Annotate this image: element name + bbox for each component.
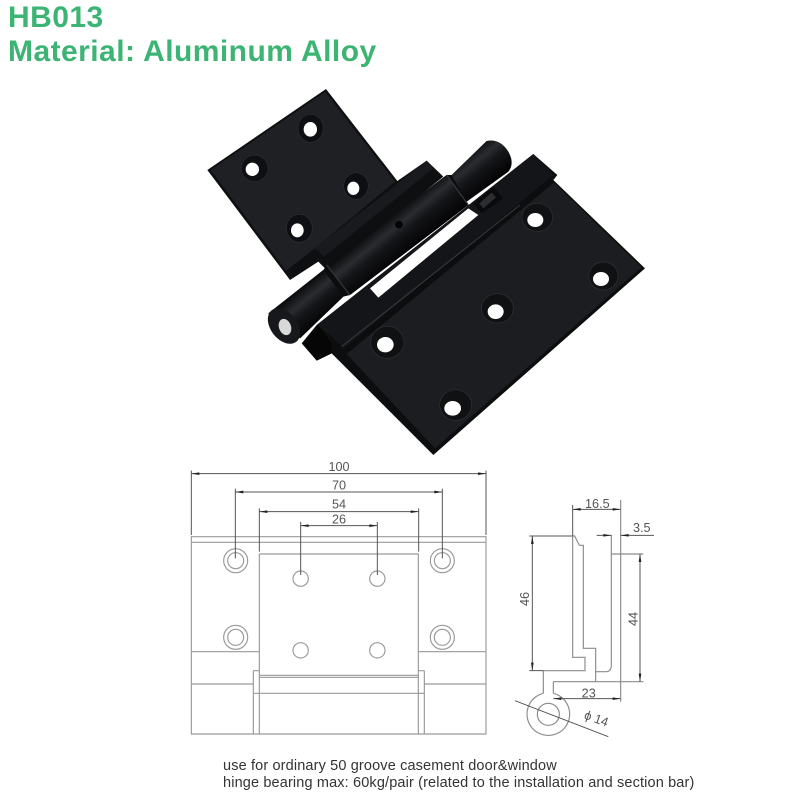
side profile technical drawing [514, 497, 654, 738]
side view dimension labels: 23 [582, 686, 596, 700]
right hinge leaf [302, 154, 645, 455]
side view dimension labels [518, 497, 651, 730]
usage note: use for ordinary 50 groove casement door&window [223, 758, 557, 774]
profile outline [543, 500, 643, 702]
title: HB013 [8, 1, 104, 34]
leaf outlines [191, 537, 486, 734]
hinge barrel [261, 141, 512, 350]
holes [224, 549, 454, 658]
front view dimension labels: 100 [328, 460, 350, 474]
side view dimension labels: 44 [626, 612, 640, 626]
dimension lines [515, 505, 654, 737]
side view dimension labels: 46 [518, 592, 532, 606]
side view dimension labels: ϕ 14 [582, 708, 610, 730]
dimension lines [191, 471, 486, 575]
usage note [223, 758, 694, 791]
side view dimension labels: 3.5 [633, 521, 651, 535]
usage note: hinge bearing max: 60kg/pair (related to the installation and section bar) [223, 775, 694, 791]
front view dimension labels: 26 [332, 512, 346, 526]
front view dimension labels: 54 [332, 498, 346, 512]
title: Material: Aluminum Alloy [8, 35, 377, 68]
hinge product photo [207, 89, 645, 455]
front view dimension labels [328, 460, 350, 526]
front view dimension labels: 70 [332, 479, 346, 493]
pivot knuckle [527, 693, 570, 735]
slot gap [370, 208, 478, 298]
front view technical drawing [190, 460, 487, 735]
title [8, 1, 377, 68]
side view dimension labels: 16.5 [585, 497, 610, 511]
left hinge leaf [207, 89, 443, 280]
